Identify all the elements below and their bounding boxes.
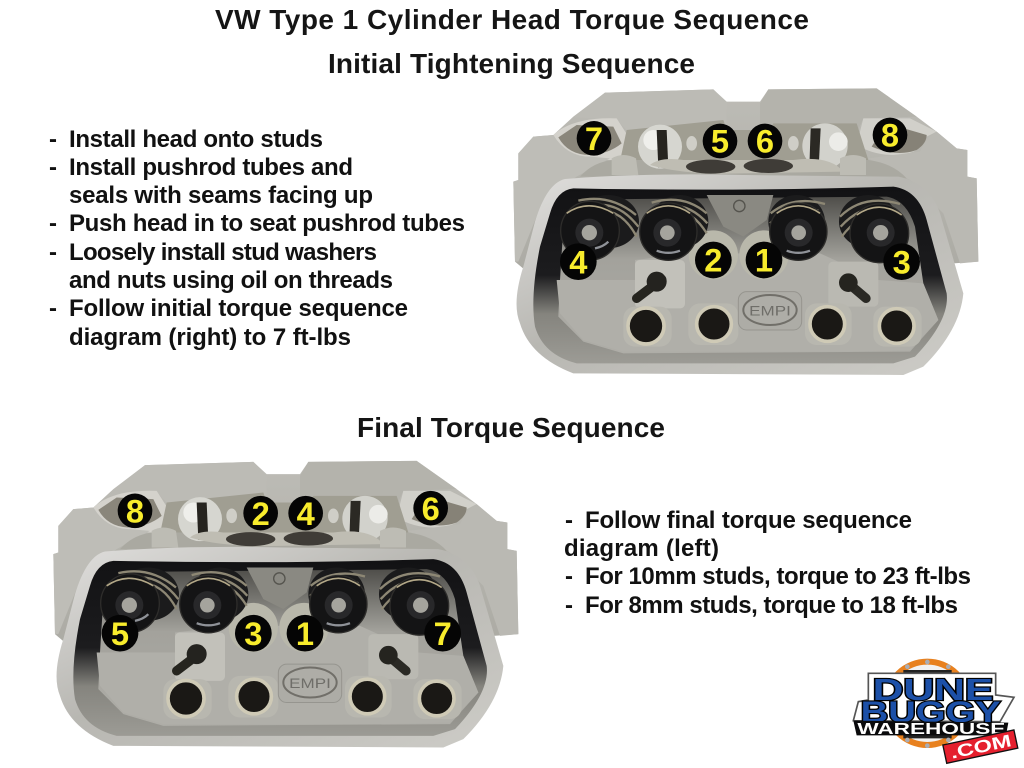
- diagram: final torque sequence cylinder head: [53, 461, 518, 747]
- heading: initial tightening sequence: Initial Tightening Sequence: [328, 48, 695, 79]
- text block: initial instructions: [49, 126, 465, 351]
- text block: final instructions: diagram (left): [564, 535, 719, 562]
- diagram: final torque sequence cylinder head: 2: [252, 495, 270, 532]
- diagram: initial torque sequence cylinder head: 8: [881, 117, 899, 154]
- text block: initial instructions: and nuts using oil on threads: [69, 267, 393, 294]
- diagram: final torque sequence cylinder head: 1: [296, 615, 314, 652]
- title: VW Type 1 Cylinder Head Torque Sequence: [215, 4, 809, 35]
- text block: final instructions: For 8mm studs, torque to 18 ft-lbs: [585, 592, 958, 619]
- text block: initial instructions: -: [49, 154, 57, 181]
- diagram: initial torque sequence cylinder head: 4: [569, 243, 587, 280]
- diagram: initial torque sequence cylinder head: EMPI: [749, 302, 791, 318]
- text block: initial instructions: Install head onto studs: [69, 126, 323, 153]
- diagram: final torque sequence cylinder head: EMPI: [289, 675, 331, 691]
- diagram: initial torque sequence cylinder head: 3: [893, 243, 911, 280]
- logo: Dune Buggy Warehouse: [853, 660, 1018, 764]
- text block: final instructions: -: [565, 563, 573, 590]
- text block: initial instructions: Follow initial torque sequence: [69, 295, 408, 322]
- diagram: initial torque sequence cylinder head: 2: [704, 242, 722, 279]
- diagram: final torque sequence cylinder head: 5: [111, 615, 129, 652]
- diagram: initial torque sequence cylinder head: 6: [756, 123, 774, 160]
- text block: initial instructions: Loosely install stud washers: [69, 239, 377, 266]
- text block: initial instructions: -: [49, 295, 57, 322]
- text block: initial instructions: -: [49, 126, 57, 153]
- logo: Dune Buggy Warehouse: .COM: [949, 730, 1013, 763]
- text block: initial instructions: diagram (right) to 7 ft-lbs: [69, 324, 351, 351]
- logo: Dune Buggy Warehouse: DUNE: [873, 673, 993, 707]
- text block: initial instructions: Push head in to seat pushrod tubes: [69, 210, 465, 237]
- text block: final instructions: For 10mm studs, torque to 23 ft-lbs: [585, 563, 971, 590]
- text block: initial instructions: seals with seams facing up: [69, 182, 373, 209]
- logo: Dune Buggy Warehouse: WAREHOUSE: [857, 721, 1005, 738]
- diagram: final torque sequence cylinder head: 3: [244, 615, 262, 652]
- text block: final instructions: -: [565, 592, 573, 619]
- text block: final instructions: [564, 507, 971, 619]
- diagram: initial torque sequence cylinder head: [513, 88, 978, 375]
- diagram: final torque sequence cylinder head: 4: [297, 495, 315, 532]
- text block: initial instructions: Install pushrod tubes and: [69, 154, 353, 181]
- logo: Dune Buggy Warehouse: BUGGY: [861, 696, 1001, 729]
- diagram: final torque sequence cylinder head: 6: [422, 490, 440, 527]
- text block: final instructions: Follow final torque sequence: [585, 507, 912, 534]
- diagram: initial torque sequence cylinder head: 1: [755, 242, 773, 279]
- diagram: initial torque sequence cylinder head: 5: [711, 123, 729, 160]
- heading: final torque sequence: Final Torque Sequence: [357, 412, 665, 443]
- diagram: final torque sequence cylinder head: 8: [126, 492, 144, 529]
- text block: initial instructions: -: [49, 210, 57, 237]
- text block: initial instructions: -: [49, 239, 57, 266]
- text block: final instructions: -: [565, 507, 573, 534]
- diagram: final torque sequence cylinder head: 7: [434, 615, 452, 652]
- diagram: initial torque sequence cylinder head: 7: [585, 120, 603, 157]
